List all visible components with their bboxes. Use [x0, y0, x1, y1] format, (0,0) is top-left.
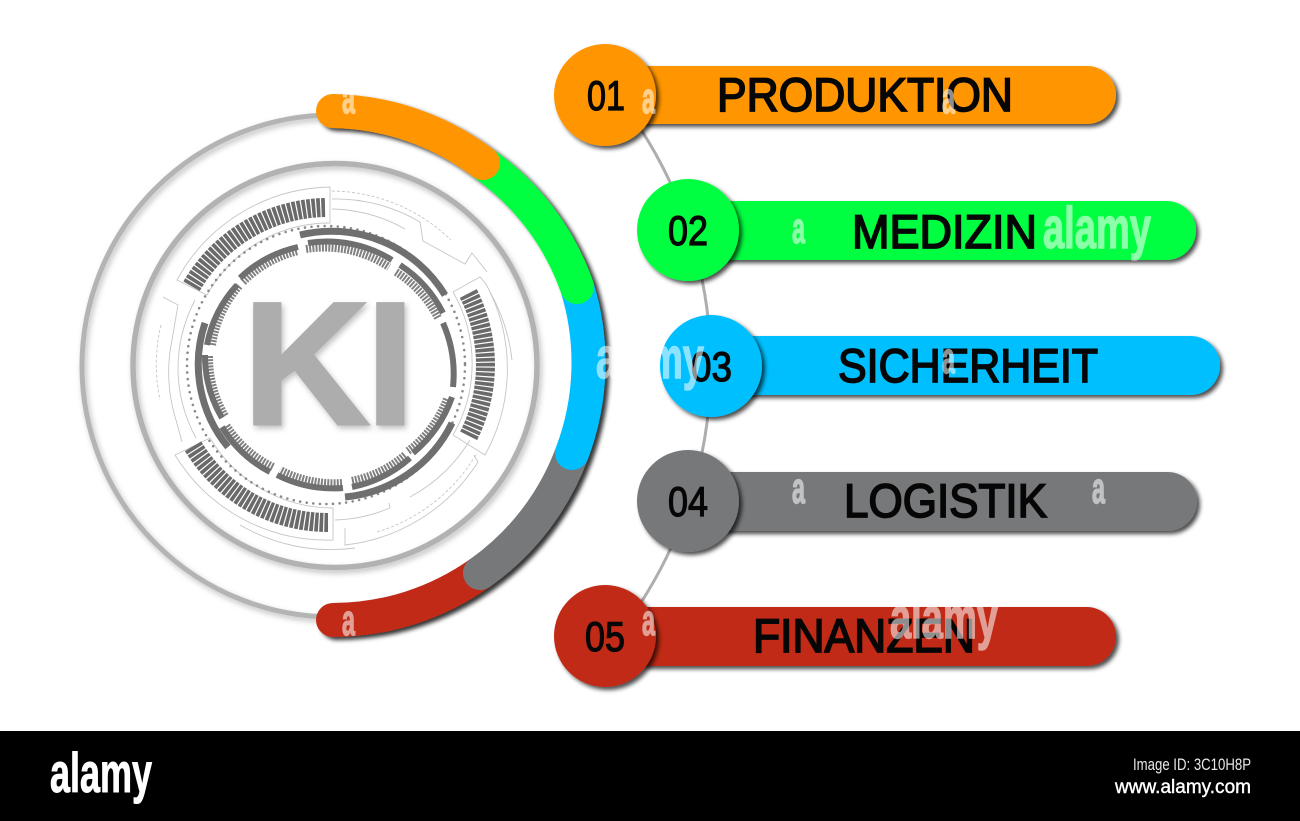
watermarks: a	[342, 74, 355, 123]
watermarks: a	[792, 204, 805, 253]
label Finanzen: FINANZEN	[753, 609, 975, 662]
number 04: 04	[668, 478, 708, 525]
bar 02	[700, 201, 1196, 260]
watermarks: a	[642, 596, 655, 645]
technology dial	[156, 187, 512, 550]
footer image id: Image ID: 3C10H8P	[1133, 755, 1251, 774]
bar 05	[620, 607, 1116, 666]
watermarks: a	[942, 334, 955, 383]
label Produktion: PRODUKTION	[717, 68, 1013, 121]
inner grey ring	[133, 164, 537, 568]
number 05: 05	[585, 613, 625, 660]
arc segment: green	[483, 163, 577, 287]
badge 03	[660, 315, 762, 417]
KI heading: I	[366, 267, 415, 462]
outer grey ring	[82, 115, 333, 617]
dial dotted ring	[187, 226, 465, 504]
watermarks: a	[942, 74, 955, 123]
dial toothed ring segments	[198, 231, 454, 497]
watermarks: alamy	[596, 326, 704, 391]
footer bar	[0, 731, 1300, 821]
watermarks: a	[792, 464, 805, 513]
badge 04	[637, 450, 739, 552]
badge 02	[637, 179, 739, 281]
watermarks: a	[342, 596, 355, 645]
segmented colour arc	[333, 111, 589, 620]
footer url: www.alamy.com	[1114, 777, 1251, 798]
arc segment: blue	[572, 287, 589, 453]
watermarks: a	[1092, 464, 1105, 513]
watermarks	[342, 74, 1151, 651]
item 05 Finanzen	[554, 585, 1116, 687]
dial tick bars	[192, 208, 485, 522]
watermarks: a	[642, 74, 655, 123]
dial thin frames	[156, 187, 512, 550]
bar 03	[724, 336, 1220, 395]
arc segment: red	[333, 573, 480, 620]
number 01: 01	[587, 72, 625, 119]
item 03 Sicherheit	[660, 315, 1220, 417]
item 04 Logistik	[637, 450, 1197, 552]
badge 05	[554, 585, 656, 687]
bar 01	[620, 66, 1116, 124]
label Logistik: LOGISTIK	[844, 474, 1047, 527]
number 02: 02	[668, 207, 708, 254]
arc segment: orange	[333, 111, 483, 163]
label Sicherheit: SICHERHEIT	[838, 339, 1098, 392]
item 01 Produktion	[554, 44, 1116, 146]
number 03: 03	[691, 343, 732, 390]
KI heading: K	[243, 267, 369, 462]
label Medizin: MEDIZIN	[852, 205, 1037, 258]
connector curve	[640, 128, 711, 604]
watermarks: alamy	[1043, 196, 1151, 261]
footer logo: alamy	[50, 741, 152, 804]
item 02 Medizin	[637, 179, 1196, 281]
badge 01	[554, 44, 656, 146]
arc segment: grey	[480, 453, 572, 573]
watermarks: alamy	[890, 586, 998, 651]
bar 04	[701, 472, 1197, 531]
